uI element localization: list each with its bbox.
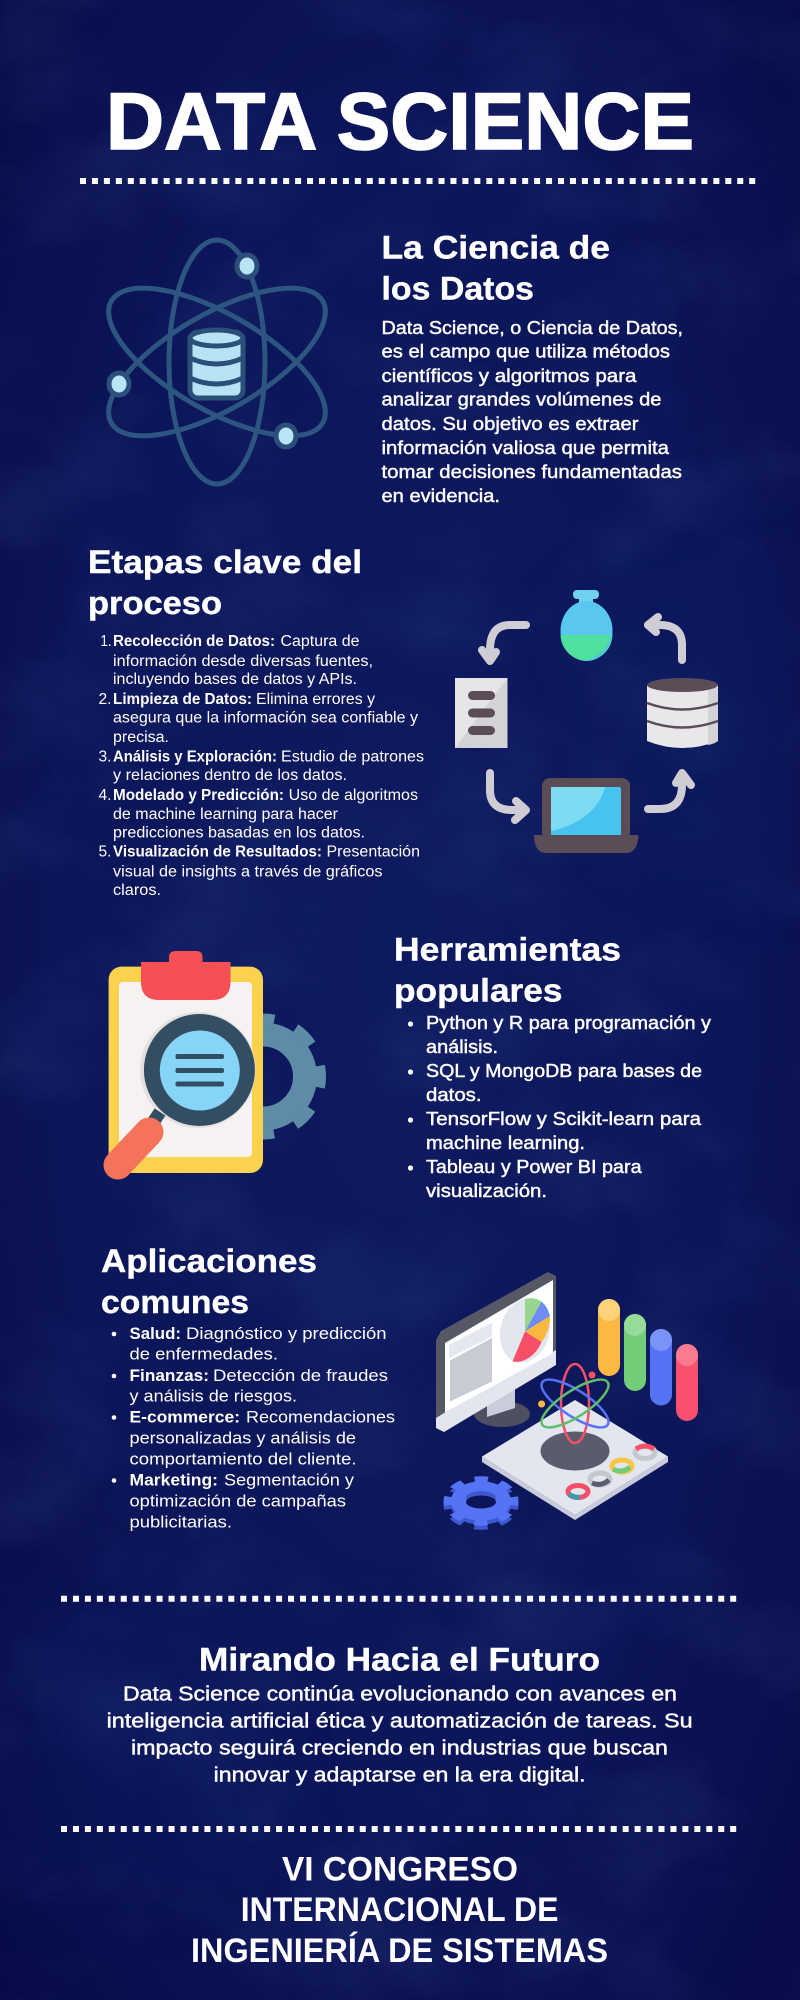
icon: isometric data workstation [436, 1272, 698, 1527]
bullet list: visualización. [426, 1180, 547, 1201]
numbered list: Análisis y Exploración: [113, 748, 277, 766]
text block: inteligencia artificial ética y automatización de tareas. Su [107, 1710, 693, 1732]
title: DATA SCIENCE [106, 77, 694, 167]
numbered list: Estudio de patrones [281, 748, 424, 766]
numbered list: visual de insights a través de gráficos [113, 864, 383, 880]
panel: herramientas populares [394, 932, 712, 1201]
icon: monitor [436, 1272, 557, 1432]
heading: proceso [88, 585, 222, 621]
bullet list: machine learning. [426, 1132, 585, 1153]
panel: etapas clave del proceso [88, 544, 424, 899]
numbered list: incluyendo bases de datos y APIs. [113, 671, 357, 688]
icon: data cycle [455, 590, 718, 853]
icon: clipboard and magnifier [109, 951, 320, 1173]
footer title: VI CONGRESO [282, 1850, 518, 1888]
heading: Etapas clave del [88, 544, 362, 580]
bullet list: Marketing: [130, 1472, 218, 1490]
bullet list: Python y R para programación y [426, 1012, 712, 1033]
arrows [482, 617, 691, 820]
numbered list: predicciones basadas en los datos. [113, 824, 365, 842]
icon: laptop [534, 778, 638, 853]
bullet list: E-commerce: [130, 1408, 240, 1426]
numbered list: 1. [100, 633, 112, 650]
bullet list: personalizadas y análisis de [130, 1430, 356, 1448]
bullet list: Salud: [130, 1325, 181, 1343]
heading [382, 230, 610, 306]
bullet list: datos. [426, 1084, 482, 1105]
heading: los Datos [382, 270, 534, 306]
numbered list: 3. [98, 748, 112, 766]
icon: atom with database [87, 240, 347, 484]
bar cylinders [598, 1299, 698, 1421]
icon: small atom [535, 1364, 615, 1443]
text block: en evidencia. [382, 485, 500, 506]
numbered list: y relaciones dentro de los datos. [113, 767, 347, 784]
heading [88, 544, 362, 621]
heading [101, 1243, 317, 1320]
icon: blue gear [448, 1479, 514, 1527]
heading: populares [394, 973, 562, 1009]
text block: analizar grandes volúmenes de [382, 389, 662, 410]
bullet list [408, 1012, 712, 1201]
bullet list: SQL y MongoDB para bases de [426, 1060, 702, 1081]
text block: es el campo que utiliza métodos [382, 341, 670, 362]
text block: datos. Su objetivo es extraer [382, 413, 638, 434]
numbered list: de machine learning para hacer [113, 806, 338, 823]
heading: Herramientas [394, 932, 621, 968]
numbered list: Modelado y Predicción: [113, 787, 284, 804]
heading [394, 932, 621, 1009]
bullet list: Recomendaciones [246, 1408, 395, 1426]
numbered list: Uso de algoritmos [289, 787, 418, 804]
bullet list: TensorFlow y Scikit-learn para [426, 1108, 702, 1129]
text block: información valiosa que permita [382, 437, 670, 458]
text block [382, 317, 683, 506]
numbered list: 4. [98, 787, 112, 804]
numbered list: 2. [98, 691, 112, 708]
numbered list: Elimina errores y [256, 691, 375, 708]
panel: la ciencia de los datos [382, 230, 683, 506]
bullet list: y análisis de riesgos. [130, 1388, 297, 1406]
text block: Data Science continúa evolucionando con avances en [123, 1684, 677, 1706]
text block: impacto seguirá creciendo en industrias que buscan [131, 1738, 668, 1760]
text block [107, 1684, 693, 1786]
bullet list [112, 1325, 395, 1532]
bullet list: Diagnóstico y predicción [186, 1325, 387, 1343]
bullet list: optimización de campañas [130, 1492, 346, 1510]
numbered list: Visualización de Resultados: [113, 844, 322, 861]
bullet list: análisis. [426, 1036, 498, 1057]
numbered list: Captura de [280, 633, 360, 650]
text block: innovar y adaptarse en la era digital. [214, 1764, 585, 1786]
bullet list: de enfermedades. [130, 1346, 278, 1364]
numbered list: Presentación [326, 844, 420, 861]
bullet list: Segmentación y [224, 1472, 355, 1490]
bullet list: Finanzas: [130, 1367, 209, 1385]
bullet list: comportamiento del cliente. [130, 1450, 356, 1468]
numbered list: Recolección de Datos: [113, 633, 275, 650]
footer title: INGENIERÍA DE SISTEMAS [191, 1932, 608, 1970]
numbered list [98, 633, 424, 899]
numbered list: Limpieza de Datos: [113, 691, 252, 708]
bullet list: Detección de fraudes [213, 1367, 388, 1385]
pie chart [493, 1293, 557, 1368]
platform [482, 1400, 668, 1520]
heading: comunes [101, 1284, 249, 1320]
numbered list: información desde diversas fuentes, [113, 653, 373, 670]
numbered list: claros. [113, 882, 161, 899]
footer title: INTERNACIONAL DE [241, 1891, 558, 1929]
numbered list: 5. [98, 844, 112, 861]
footer title [191, 1850, 608, 1970]
bullet list: publicitarias. [130, 1514, 232, 1532]
panel: aplicaciones comunes [101, 1243, 395, 1532]
text block: Data Science, o Ciencia de Datos, [382, 317, 683, 338]
icon: flask [560, 590, 612, 661]
heading: Aplicaciones [101, 1243, 317, 1279]
text block: tomar decisiones fundamentadas [382, 461, 682, 482]
panel: mirando hacia el futuro [107, 1642, 693, 1786]
icon: document [455, 678, 508, 748]
numbered list: asegura que la información sea confiable y [113, 710, 418, 726]
heading: La Ciencia de [382, 230, 610, 266]
icon: database [647, 678, 718, 748]
heading: Mirando Hacia el Futuro [199, 1642, 600, 1678]
numbered list: precisa. [113, 729, 169, 746]
text block: científicos y algoritmos para [382, 365, 637, 386]
bullet list: Tableau y Power BI para [426, 1156, 642, 1177]
